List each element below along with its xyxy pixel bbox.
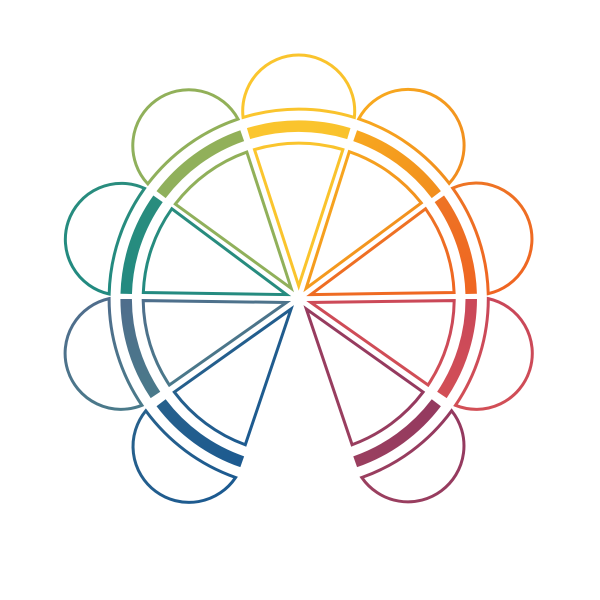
arc bar: red-orange <box>434 193 484 297</box>
pie slice: slate <box>137 260 300 387</box>
semicircle tab: yellow <box>243 55 355 117</box>
arc bar: blue <box>152 397 247 473</box>
semicircle tab: red-orange <box>453 168 547 294</box>
arc bar: yellow <box>247 120 350 139</box>
arc bar: teal <box>113 193 164 297</box>
pie slice: crimson <box>298 260 460 387</box>
segment: orange <box>270 67 486 314</box>
wheel diagram <box>50 55 547 525</box>
arc bar: green <box>152 124 247 200</box>
pie slice: plum <box>271 283 427 450</box>
arc bar: plum <box>351 397 445 473</box>
pie slice: orange <box>270 146 425 314</box>
pie slice: teal <box>137 207 301 336</box>
semicircle tab: slate <box>51 298 142 423</box>
segment: red-orange <box>297 168 547 336</box>
arc bar: slate <box>113 296 161 400</box>
arc bar: orange <box>351 124 445 200</box>
arc bar: crimson <box>436 296 484 400</box>
semicircle tab: crimson <box>455 298 546 423</box>
segment: green <box>111 68 327 314</box>
semicircle tab: orange <box>358 67 486 184</box>
segment: teal <box>50 168 301 336</box>
semicircle tab: teal <box>50 168 145 294</box>
pie slice: yellow <box>255 143 343 286</box>
segment: plum <box>271 283 486 524</box>
segment: slate <box>51 260 300 423</box>
semicircle tab: plum <box>362 411 486 524</box>
segment: blue <box>111 283 327 525</box>
segment: crimson <box>298 260 546 423</box>
segment: yellow <box>243 55 355 286</box>
pie slice: blue <box>170 283 327 450</box>
pie slice: green <box>172 147 327 314</box>
semicircle tab: green <box>111 68 238 184</box>
pie slice: red-orange <box>297 207 460 336</box>
semicircle tab: blue <box>111 411 236 525</box>
